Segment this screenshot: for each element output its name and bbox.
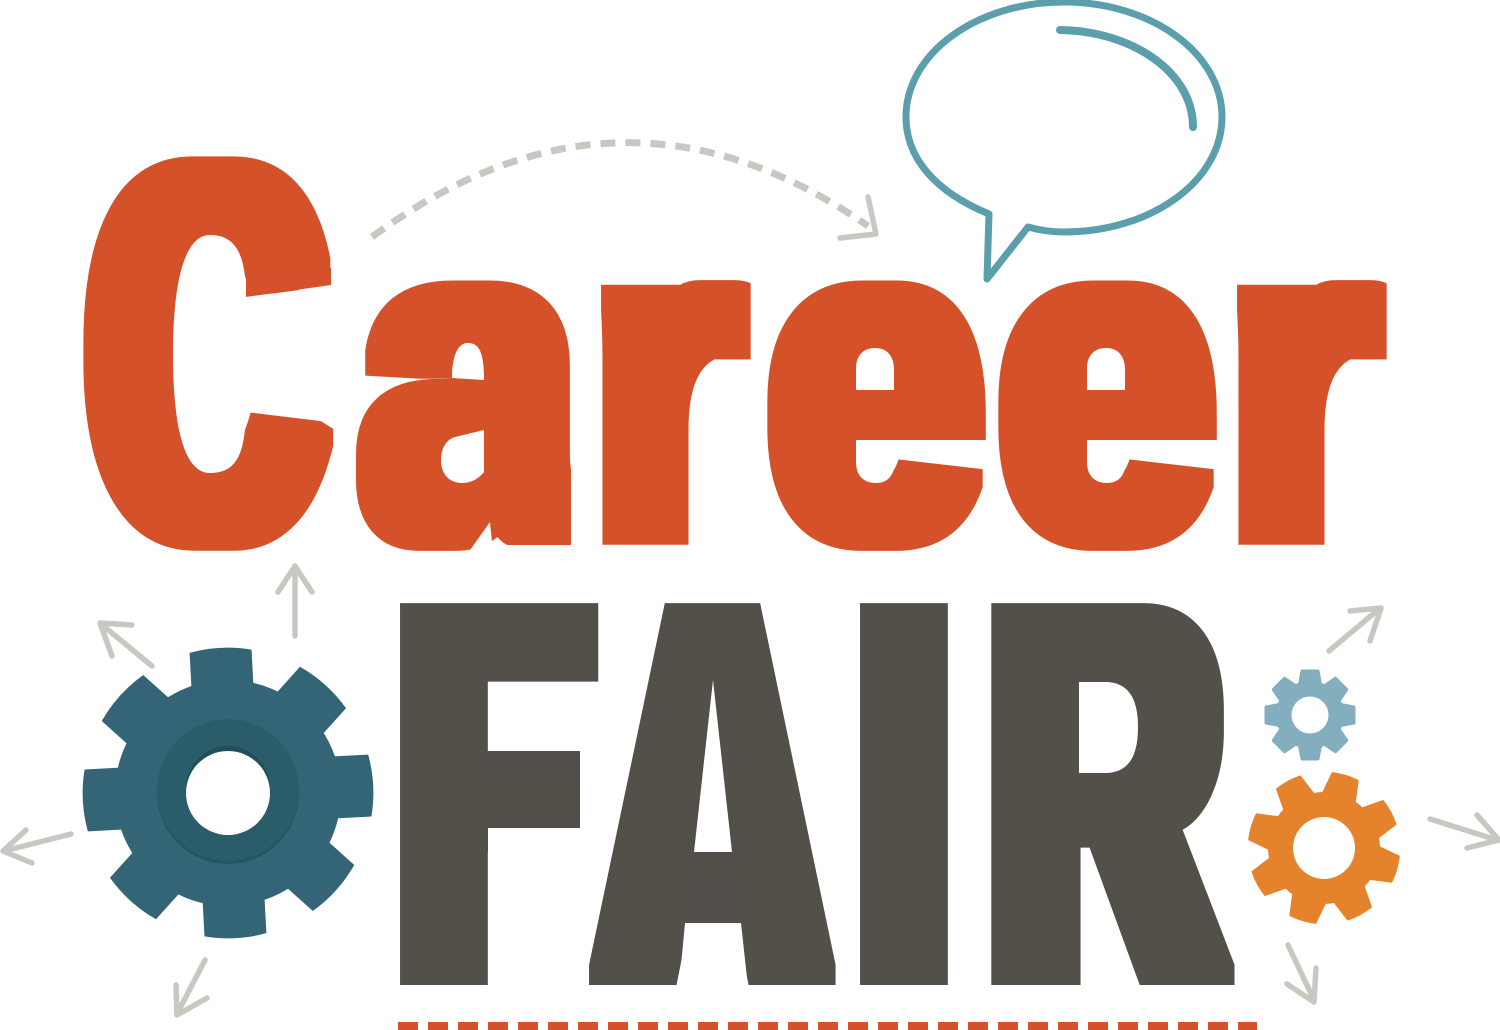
letter r: r: [594, 130, 739, 627]
letter C: C: [90, 56, 322, 651]
icon: small light-blue gear: [1266, 671, 1354, 759]
letter r: r: [1230, 130, 1375, 627]
arrow: down-right of orange gear: [1287, 945, 1316, 1002]
letter e: e: [769, 129, 982, 630]
speech bubble icon: [906, 2, 1222, 279]
letter counter adjustments: [165, 235, 1221, 987]
arrow: left of blue gear: [3, 830, 71, 863]
arrow: up beside blue gear: [278, 566, 312, 636]
arrow: up-right of small gear: [1329, 608, 1381, 651]
arrow: up-left of blue gear: [100, 623, 152, 666]
title word: FAIR: [402, 499, 1219, 1030]
letter a: a: [363, 129, 580, 629]
arrow: down-left of blue gear: [176, 960, 207, 1015]
arrow: right of orange gear: [1430, 815, 1499, 848]
icon: orange gear: [1246, 770, 1402, 926]
icon: large blue gear: [81, 646, 375, 940]
dashed orange rule: [398, 1022, 1257, 1030]
title word: Career: [90, 56, 1375, 651]
letter e: e: [1000, 129, 1213, 630]
dashed curved arrow: [372, 143, 876, 238]
